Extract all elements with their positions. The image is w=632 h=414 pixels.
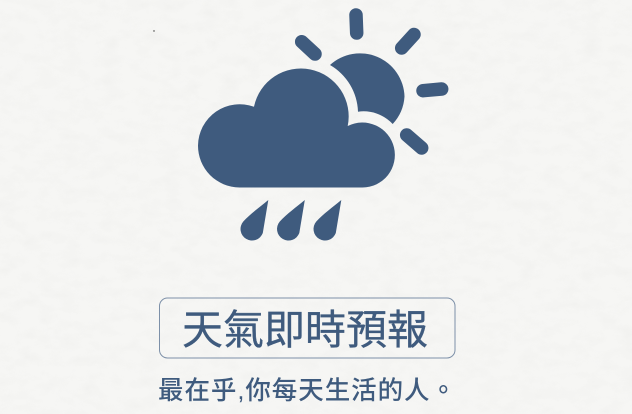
title: 天氣即時預報 (182, 307, 428, 353)
icon: weather, cloud with sun and rain (198, 15, 442, 240)
tagline: 最在乎,你每天生活的人。 (158, 377, 456, 405)
icon: sun rays (302, 15, 442, 148)
title box (160, 298, 455, 358)
icon: raindrops (241, 200, 341, 240)
icon: sun disc (330, 53, 404, 124)
icon: cloud (198, 69, 395, 188)
